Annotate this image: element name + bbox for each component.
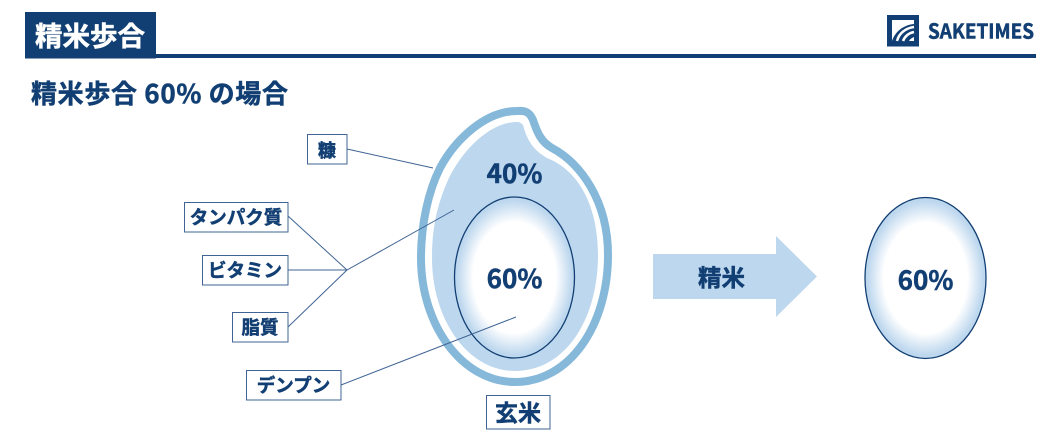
label: 脂質: 脂質 <box>241 314 279 340</box>
header bar <box>25 12 1036 58</box>
brown rice grain <box>421 111 608 382</box>
grain bran outline <box>421 111 608 382</box>
label: 40%: 40% <box>487 154 542 191</box>
polished kernel 60% <box>454 197 574 358</box>
polished rice 60%: 60% <box>898 260 953 298</box>
label: 糠 <box>308 134 347 164</box>
label: デンプン: デンプン <box>257 372 330 398</box>
label: タンパク質: タンパク質 <box>190 204 282 230</box>
leader lines <box>288 149 516 385</box>
label: 糠: 糠 <box>318 137 336 163</box>
subtitle: 精米歩合 60% の場合 <box>31 74 288 111</box>
logo: SAKETIMES <box>887 15 1034 46</box>
logo: SAKETIMES: SAKETIMES <box>928 16 1034 44</box>
polished rice 60% <box>865 198 986 358</box>
label: 玄米: 玄米 <box>495 394 541 428</box>
grain bran fill 40% <box>432 122 598 371</box>
arrow: 精米 <box>653 236 817 317</box>
label: ビタミン: ビタミン <box>208 257 282 283</box>
arrow: 精米: 精米 <box>698 259 745 293</box>
label: デンプン <box>246 370 341 400</box>
heading: 精米歩合: 精米歩合 <box>35 15 145 54</box>
label: 脂質 <box>232 312 288 342</box>
label: 60%: 60% <box>487 259 542 296</box>
